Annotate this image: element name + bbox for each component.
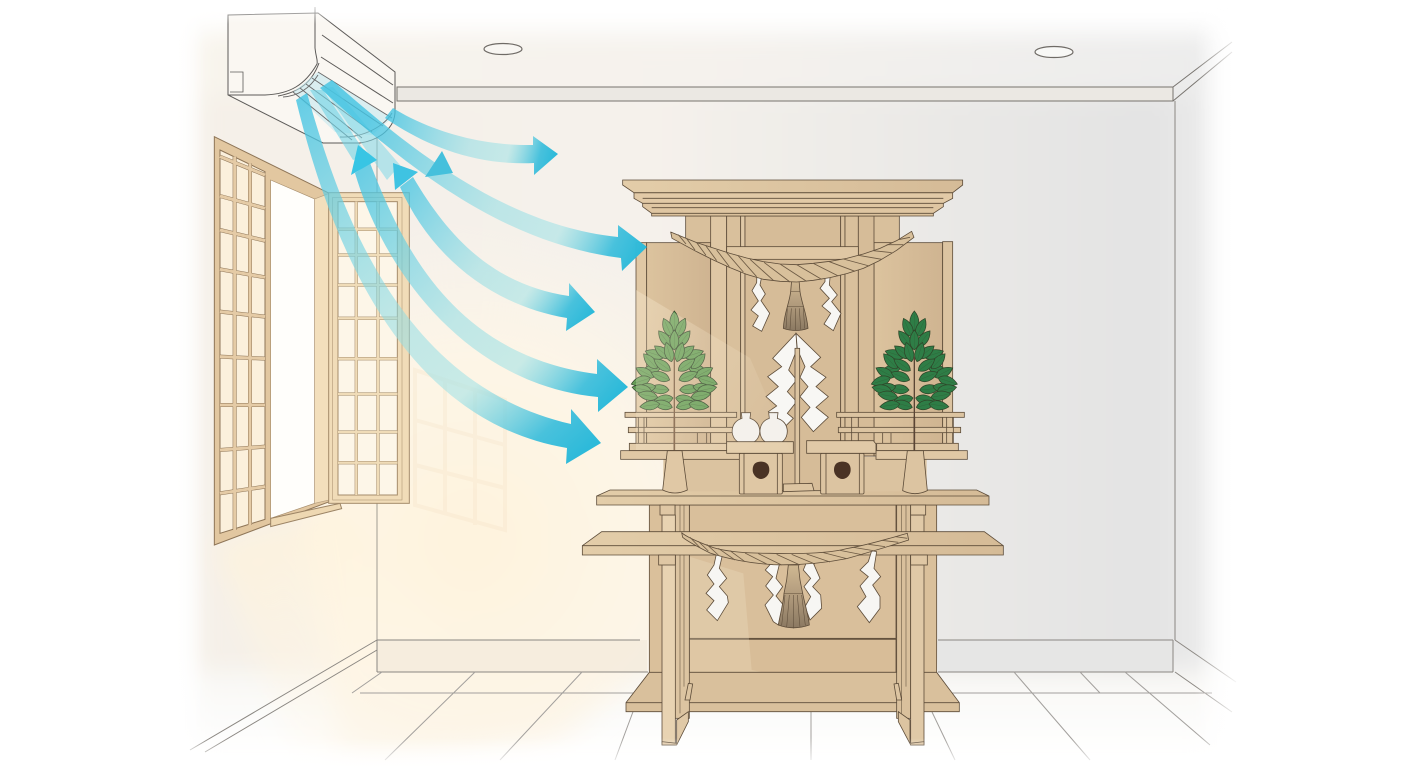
light on lower panel [689, 557, 783, 697]
middle shelf [582, 532, 1003, 555]
sacred rope [671, 231, 914, 282]
sunlight on wall [214, 213, 750, 768]
back panel [649, 505, 937, 673]
sake jars [732, 413, 787, 442]
back boards [636, 216, 953, 491]
arrow 1 [385, 108, 558, 175]
rear fence right [837, 412, 964, 451]
lower sacred rope [682, 533, 909, 565]
shrine upper structure [621, 180, 967, 494]
arrow 5 [296, 93, 601, 464]
window opening [271, 180, 315, 518]
upward arrowhead 3 [393, 163, 418, 190]
arrow 3 [400, 177, 595, 331]
shrine lower structure [582, 490, 1003, 745]
window sill [271, 503, 342, 527]
upper brackets [660, 505, 926, 515]
top lower shelf [597, 490, 989, 505]
left legs [662, 505, 693, 745]
arrow 2 [320, 80, 647, 271]
unit control box [230, 72, 243, 92]
ceiling and wall fill [195, 32, 1215, 755]
lower streamer 3 [803, 562, 822, 620]
room line art [190, 42, 1236, 760]
tassel [783, 280, 808, 330]
ceiling light left [484, 44, 522, 54]
window [214, 137, 409, 545]
unit front curve [228, 7, 317, 95]
wall corner and baseboards [190, 137, 1236, 752]
small arrowhead on arrow 2 [425, 151, 453, 177]
sakaki tree right [870, 311, 959, 451]
window shadow on wall [415, 370, 505, 530]
platform [621, 451, 967, 459]
ceiling light right [1035, 46, 1073, 58]
offering wand [783, 348, 814, 492]
crown molding [397, 42, 1232, 640]
paper streamer right [820, 269, 841, 331]
vase right [903, 451, 927, 494]
roof [623, 180, 963, 216]
floor tiles [352, 672, 1212, 760]
right shoji panel [329, 193, 409, 503]
light wash on shrine [636, 290, 790, 450]
offering stand right [807, 441, 876, 494]
window reveal [315, 193, 329, 503]
unit body [228, 13, 395, 143]
unit side lines [278, 35, 393, 103]
rear fence left [625, 412, 737, 451]
airflow arrows [296, 80, 647, 464]
large paper streamer [766, 333, 828, 432]
faint ray to upward head 3 [323, 87, 400, 180]
faint ray to upward head 4 [310, 90, 367, 160]
lower brackets [659, 555, 927, 565]
vase left [663, 451, 687, 493]
room background [195, 32, 1215, 768]
right legs [894, 505, 924, 745]
lower streamer 4 [857, 551, 881, 623]
arrow 4 [355, 163, 628, 412]
paper streamer left [751, 270, 770, 331]
lower streamer 1 [706, 553, 728, 621]
lower tassel [778, 565, 809, 628]
baseboards [377, 640, 1173, 672]
lower streamer 2 [765, 562, 783, 625]
air conditioner [228, 7, 395, 143]
centre pillars and panel [711, 216, 874, 491]
sakaki tree left [630, 311, 719, 451]
left shoji panel [214, 137, 329, 545]
unit vent tint [293, 72, 392, 135]
offering stand left [727, 442, 793, 494]
bottom shelf [626, 672, 959, 712]
upward arrowhead 4 [351, 145, 377, 175]
louvers [283, 72, 392, 140]
